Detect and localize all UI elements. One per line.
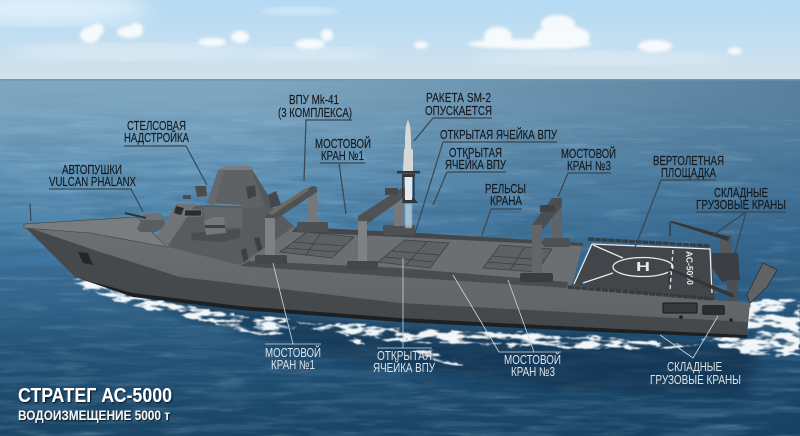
- label: open VLS cell: ЯЧЕЙКА ВПУ: [445, 157, 506, 172]
- label: open VLS cell: [433, 146, 506, 205]
- label: bridge crane 1 upper: МОСТОВОЙ: [315, 136, 371, 151]
- forward gun mount: [191, 217, 240, 242]
- label: open VLS cell lower: ЯЧЕЙКА ВПУ: [373, 360, 435, 375]
- helipad: [572, 244, 715, 300]
- label: Vulcan Phalanx: VULCAN PHALANX: [49, 175, 137, 189]
- label: bridge crane 1 upper: КРАН №1: [321, 149, 364, 163]
- label: crane rails: РЕЛЬСЫ: [485, 182, 526, 196]
- deck lettering: АС-5000: [684, 251, 695, 285]
- label: Mk-41 launcher: ВПУ Мk-41: [289, 93, 339, 107]
- label: Vulcan Phalanx: АВТОПУШКИ: [62, 163, 122, 177]
- label: folding cargo cranes lower: [650, 316, 741, 387]
- mast on bow: [30, 204, 31, 221]
- stern ramp: [747, 263, 777, 303]
- label: SM-2 missile: ОПУСКАЕТСЯ: [425, 104, 492, 118]
- ship reflection on water: [90, 285, 760, 395]
- Phalanx autocannon: [125, 213, 166, 232]
- label: open VLS cell: ОТКРЫТАЯ: [449, 146, 502, 160]
- label: bridge crane 1 lower: [265, 263, 321, 372]
- label: bridge crane 3 lower: КРАН №3: [511, 365, 555, 379]
- label: stealth superstructure: [124, 119, 207, 185]
- subtitle: ВОДОИЗМЕЩЕНИЕ 5000 т: [18, 407, 170, 423]
- ship: [24, 166, 777, 338]
- label: Mk-41 launcher: (3 КОМПЛЕКСА): [278, 106, 352, 120]
- helipad H: H: [636, 259, 650, 274]
- hull: [24, 224, 750, 338]
- SM-2 missile: [397, 120, 420, 228]
- label: crane rails: [482, 182, 526, 235]
- missile body: [403, 120, 413, 171]
- label: bridge crane 3 upper: КРАН №3: [567, 159, 611, 173]
- crane 3: [520, 198, 570, 282]
- folding cargo crane lower: [668, 268, 738, 301]
- label: folding cargo cranes lower: СКЛАДНЫЕ: [667, 360, 722, 374]
- label: open VLS cell wide: [415, 127, 557, 233]
- main deck: [240, 227, 583, 288]
- label: bridge crane 1 lower: МОСТОВОЙ: [265, 345, 321, 360]
- hull dark lower band: [24, 226, 748, 335]
- label: helipad: ПЛОЩАДКА: [661, 166, 717, 180]
- deck hatches: [280, 232, 552, 272]
- clouds: [0, 0, 742, 64]
- label: SM-2 missile: [414, 91, 492, 141]
- hull openings: [78, 252, 93, 265]
- label: folding cargo cranes upper: СКЛАДНЫЕ: [714, 186, 768, 200]
- stern block: [712, 253, 740, 282]
- helipad markings: [574, 244, 712, 293]
- label: folding cargo cranes upper: [696, 186, 786, 253]
- label: helipad: ВЕРТОЛЕТНАЯ: [653, 154, 724, 168]
- folding cargo crane upper: [669, 221, 732, 253]
- label: Vulcan Phalanx: [49, 163, 143, 212]
- label: bridge crane 3 lower: МОСТОВОЙ: [504, 352, 561, 367]
- label: stealth superstructure: СТЕЛСОВАЯ: [127, 119, 186, 133]
- label: Mk-41 launcher: [278, 93, 352, 181]
- label: bridge crane 1 lower: КРАН №1: [271, 358, 315, 372]
- label: bridge crane 3 upper: МОСТОВОЙ: [561, 146, 616, 161]
- crane 2: [347, 186, 415, 270]
- bow and stern wake: [70, 278, 800, 364]
- missile plume: [405, 204, 412, 228]
- label: open VLS cell lower: ОТКРЫТАЯ: [377, 349, 432, 363]
- label: crane rails: КРАНА: [490, 194, 523, 208]
- label: SM-2 missile: РАКЕТА SM-2: [426, 91, 491, 105]
- label: helipad: [634, 154, 724, 250]
- label: bridge crane 1 upper: [315, 136, 371, 214]
- sky: [0, 0, 800, 82]
- label: open VLS cell lower: [373, 258, 435, 375]
- superstructure: [157, 166, 295, 265]
- launch platform: [397, 171, 420, 203]
- label: bridge crane 3 lower: [453, 275, 561, 379]
- foredeck: [24, 217, 167, 247]
- deck railings: [568, 239, 713, 299]
- label: stealth superstructure: НАДСТРОЙКА: [124, 130, 190, 145]
- label: folding cargo cranes lower: ГРУЗОВЫЕ КРАНЫ: [650, 373, 741, 387]
- label: open VLS cell wide: ОТКРЫТАЯ ЯЧЕЙКА ВПУ: [440, 127, 557, 142]
- crane 1: [255, 186, 328, 264]
- title: СТРАТЕГ АС-5000: [18, 385, 172, 407]
- title block: [18, 385, 172, 423]
- label: bridge crane 3 upper: [558, 146, 616, 197]
